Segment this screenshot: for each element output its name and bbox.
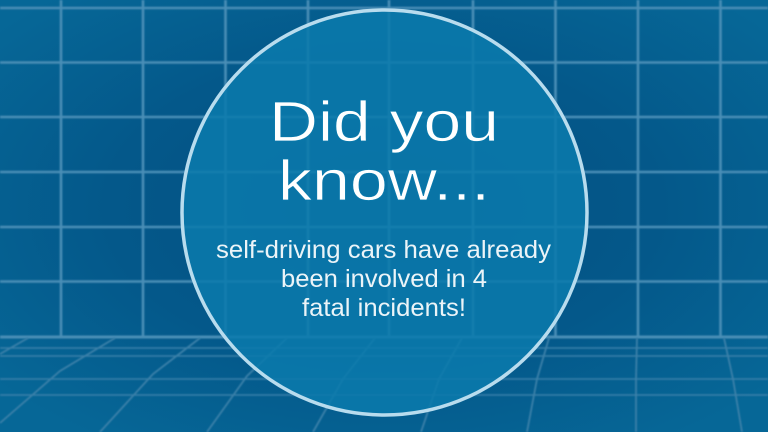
title: Did you: [269, 90, 499, 154]
title: know...: [278, 149, 490, 213]
body text: been involved in 4: [281, 265, 487, 293]
wall grid: [0, 0, 768, 337]
title: [269, 90, 499, 213]
body text: self-driving cars have already: [216, 236, 552, 264]
body text: [216, 236, 552, 322]
body text: fatal incidents!: [302, 294, 466, 322]
floor grid: [0, 338, 768, 432]
circle panel: [182, 10, 587, 415]
